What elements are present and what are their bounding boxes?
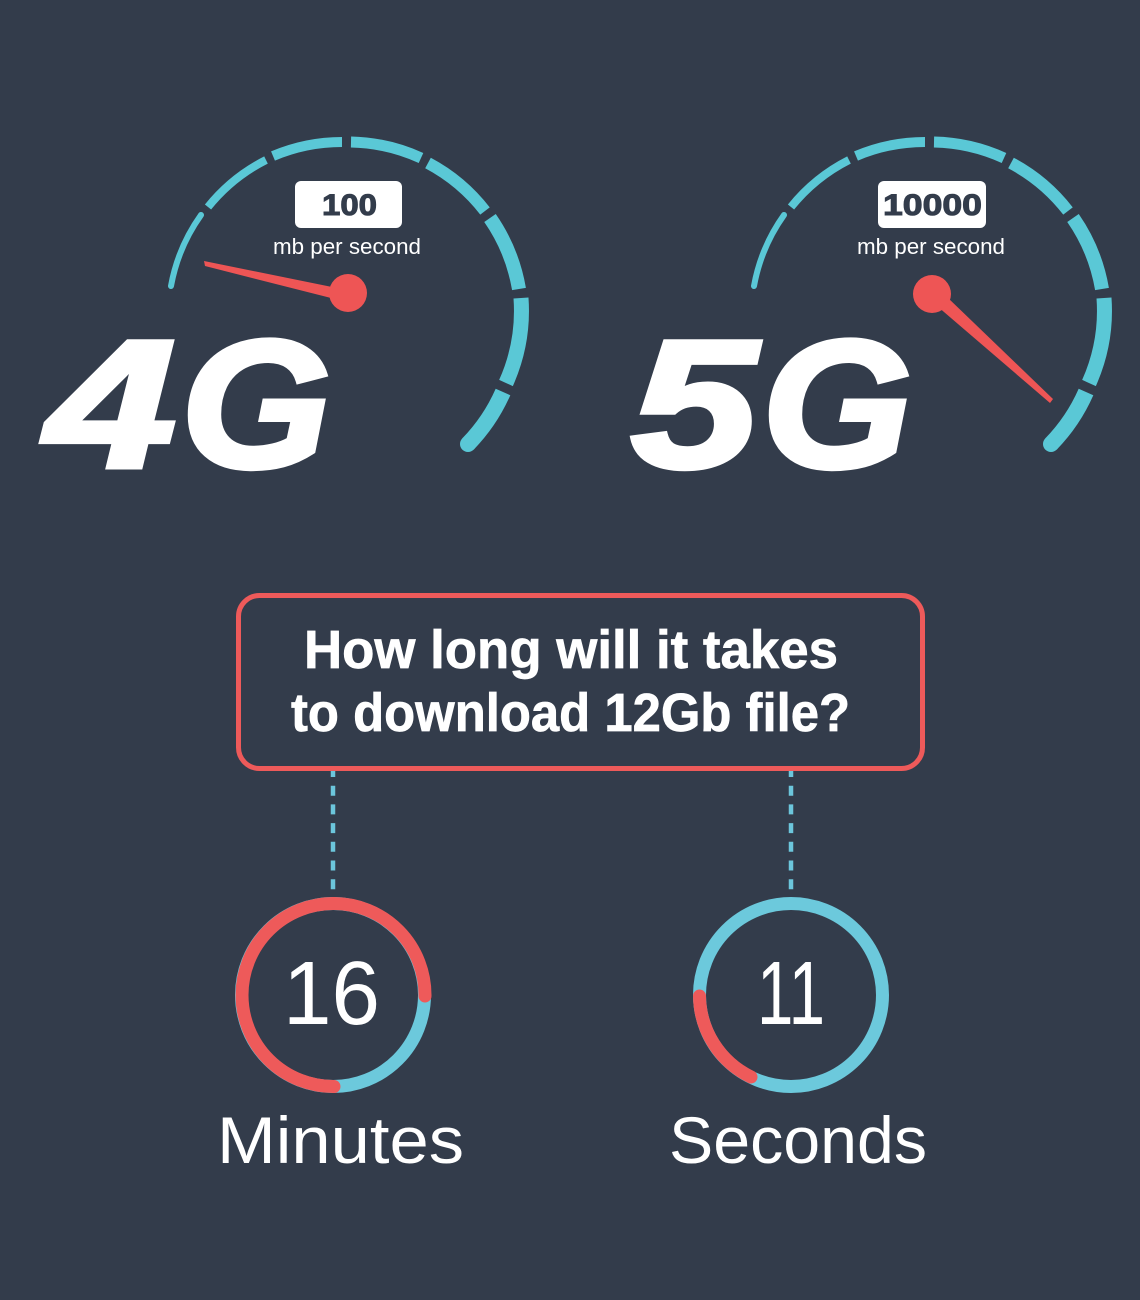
big label: 5G: 5 <box>631 302 760 506</box>
gauge arc end: 4G <box>468 392 503 444</box>
unit label: mb per second <box>857 234 1005 259</box>
speed value: 100: 100 <box>322 189 377 222</box>
result: 4G 16 minutes <box>217 904 464 1177</box>
ring: 5G time <box>700 904 882 1086</box>
needle: 4G <box>204 261 367 312</box>
big label: 4G <box>41 302 331 506</box>
big label: 4G: G <box>181 302 331 506</box>
unit label: mb per second <box>273 234 421 259</box>
gauge arc: 5G <box>754 142 1104 383</box>
speed value: 10000: 10000 <box>883 189 982 222</box>
gauge arc end: 5G <box>1051 392 1086 444</box>
big label: 4G: 4 <box>41 302 176 506</box>
big label: 5G <box>631 302 912 506</box>
needle: 5G <box>913 275 1053 403</box>
gauge arc end cap: 4G <box>460 436 476 452</box>
big label: 5G: G <box>762 302 912 506</box>
label: Seconds: Seconds <box>669 1103 927 1177</box>
question box <box>238 596 922 768</box>
gauge arc: 4G <box>171 142 521 383</box>
speed value: 100 <box>295 181 402 228</box>
connector: question to 4G result <box>331 771 335 891</box>
question text: to download 12Gb file? <box>291 683 850 743</box>
question text: How long will it takes <box>304 620 838 680</box>
panel: 4G gauge <box>41 142 521 506</box>
speed value: 10000 <box>878 181 986 228</box>
number: 16: 16 <box>283 944 380 1044</box>
gauge arc end cap: 5G <box>1043 436 1059 452</box>
connector: question to 5G result <box>789 771 793 891</box>
number: 11: 11 <box>757 944 825 1044</box>
panel: 5G gauge <box>631 142 1104 506</box>
result: 5G 11 seconds <box>669 904 927 1177</box>
question text <box>291 620 850 743</box>
label: Minutes: Minutes <box>217 1103 464 1177</box>
ring: 4G time <box>242 904 425 1087</box>
